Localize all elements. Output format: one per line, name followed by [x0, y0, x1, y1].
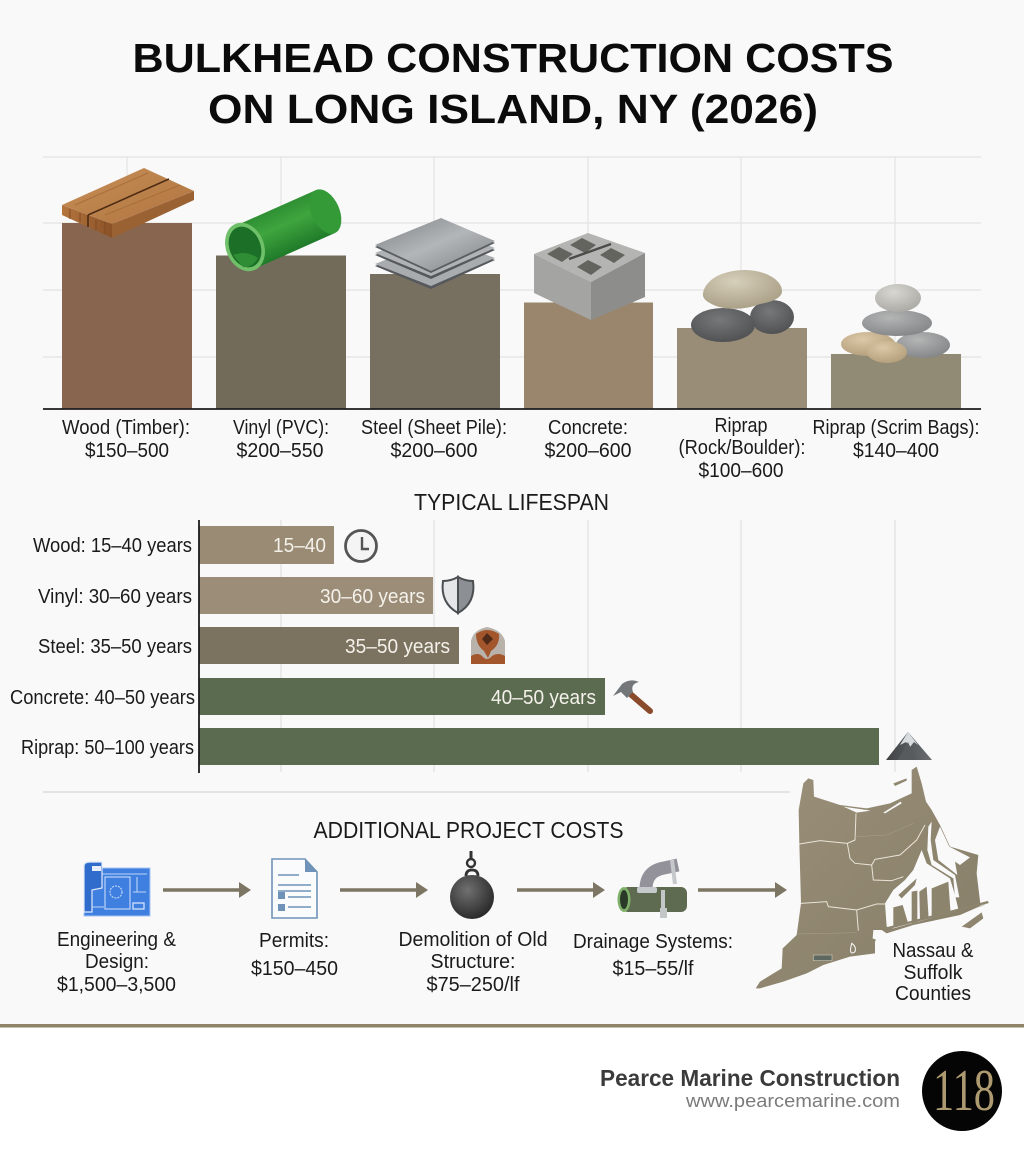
- bar: steel lifespan: 35–50 years: [345, 636, 450, 658]
- bar: concrete lifespan: [199, 678, 605, 715]
- arrow 4: [698, 882, 787, 898]
- arrow 1: [163, 882, 251, 898]
- bar: wood: [62, 223, 192, 409]
- icon: rusted steel: [471, 627, 505, 664]
- label: permits: Permits:: [259, 930, 329, 952]
- label: demolition: Structure:: [430, 951, 516, 973]
- lifespan row labels: Steel: 35–50 years: [38, 636, 192, 658]
- lifespan row labels: Vinyl: 30–60 years: [38, 586, 192, 608]
- arrow 2: [340, 882, 428, 898]
- land: south fork strips: [893, 878, 951, 927]
- icon: timber planks: [62, 168, 194, 238]
- icon: boulders: [691, 270, 794, 342]
- bar: steel: [370, 274, 500, 409]
- icon: green PVC pipe: [218, 184, 348, 277]
- heading: typical lifespan: TYPICAL LIFESPAN: [414, 489, 609, 515]
- bar: riprap lifespan: [199, 728, 879, 765]
- map: Nassau and Suffolk counties: [756, 767, 988, 1005]
- icon: clock: [346, 530, 376, 562]
- label: steel: $200–600: [390, 440, 478, 462]
- title: BULKHEAD CONSTRUCTION COSTS: [132, 35, 894, 81]
- icon: blueprint: [84, 862, 150, 916]
- panel: material cost bar chart: [43, 157, 981, 482]
- label: drainage: Drainage Systems:: [573, 931, 733, 953]
- heading: additional project costs: ADDITIONAL PROJECT COSTS: [314, 817, 624, 843]
- icon: shield: [443, 577, 473, 613]
- label: wood: Wood (Timber):: [62, 417, 190, 439]
- lifespan row labels: Riprap: 50–100 years: [21, 737, 194, 759]
- title: ON LONG ISLAND, NY (2026): [208, 86, 818, 132]
- title: [132, 35, 894, 132]
- water: channel: [927, 822, 959, 897]
- website: www.pearcemarine.com: [685, 1091, 900, 1111]
- icon: hammer: [613, 680, 650, 711]
- label: riprap scrim bags: Riprap (Scrim Bags):: [812, 417, 980, 439]
- label: riprap rock: $100–600: [698, 460, 784, 482]
- company name: Pearce Marine Construction: [600, 1065, 900, 1091]
- bar: vinyl lifespan: [199, 577, 433, 614]
- bar: steel lifespan: [199, 627, 459, 664]
- panel: additional costs flow: [57, 851, 787, 996]
- icon: permit document: [272, 859, 317, 918]
- label: concrete: Concrete:: [548, 417, 628, 439]
- logo badge: 118: [933, 1057, 995, 1123]
- bar: wood lifespan: 15–40: [273, 535, 326, 557]
- bar: concrete: [524, 302, 653, 409]
- icon: scrim bag stones: [841, 284, 950, 363]
- label: counties: Counties: [895, 983, 971, 1005]
- label: engineering: $1,500–3,500: [57, 974, 176, 996]
- logo badge: [922, 1051, 1002, 1131]
- label: drainage: $15–55/lf: [612, 958, 694, 980]
- icon: drainage pipe: [618, 860, 687, 918]
- arrow 3: [517, 882, 605, 898]
- lifespan row labels: Wood: 15–40 years: [33, 535, 192, 557]
- label: engineering: Design:: [85, 951, 149, 973]
- label: vinyl: Vinyl (PVC):: [233, 417, 329, 439]
- icon: mountain: [886, 732, 932, 760]
- label: wood: $150–500: [85, 440, 169, 462]
- label: engineering: Engineering &: [57, 929, 177, 951]
- water: south bay: [885, 850, 959, 928]
- bar: vinyl: [216, 256, 346, 409]
- label: riprap scrim bags: $140–400: [853, 440, 939, 462]
- icon: steel sheets: [375, 218, 495, 289]
- label: concrete: $200–600: [544, 440, 632, 462]
- label: demolition: Demolition of Old: [398, 929, 548, 951]
- lifespan row labels: Concrete: 40–50 years: [10, 687, 195, 709]
- label: counties: Nassau &: [892, 940, 974, 962]
- label: riprap rock: Riprap: [714, 415, 768, 437]
- lifespan row labels: [10, 535, 195, 759]
- icon: wrecking ball: [450, 851, 494, 919]
- label: counties: Suffolk: [904, 962, 963, 984]
- icon: concrete block: [534, 233, 645, 320]
- bar: vinyl lifespan: 30–60 years: [320, 586, 425, 608]
- bar: concrete lifespan: 40–50 years: [491, 687, 596, 709]
- footer: [0, 1024, 1024, 1154]
- label: riprap rock: (Rock/Boulder):: [678, 437, 806, 459]
- bar: wood lifespan: [199, 526, 334, 564]
- water: north-east bay: [935, 827, 970, 875]
- label: permits: $150–450: [251, 958, 338, 980]
- label: steel: Steel (Sheet Pile):: [361, 417, 507, 439]
- label: vinyl: $200–550: [236, 440, 324, 462]
- bar: riprap scrim bags: [831, 354, 961, 409]
- panel: lifespan bar chart: [10, 520, 932, 773]
- bar: riprap rock: [677, 328, 807, 409]
- label: demolition: $75–250/lf: [426, 974, 520, 996]
